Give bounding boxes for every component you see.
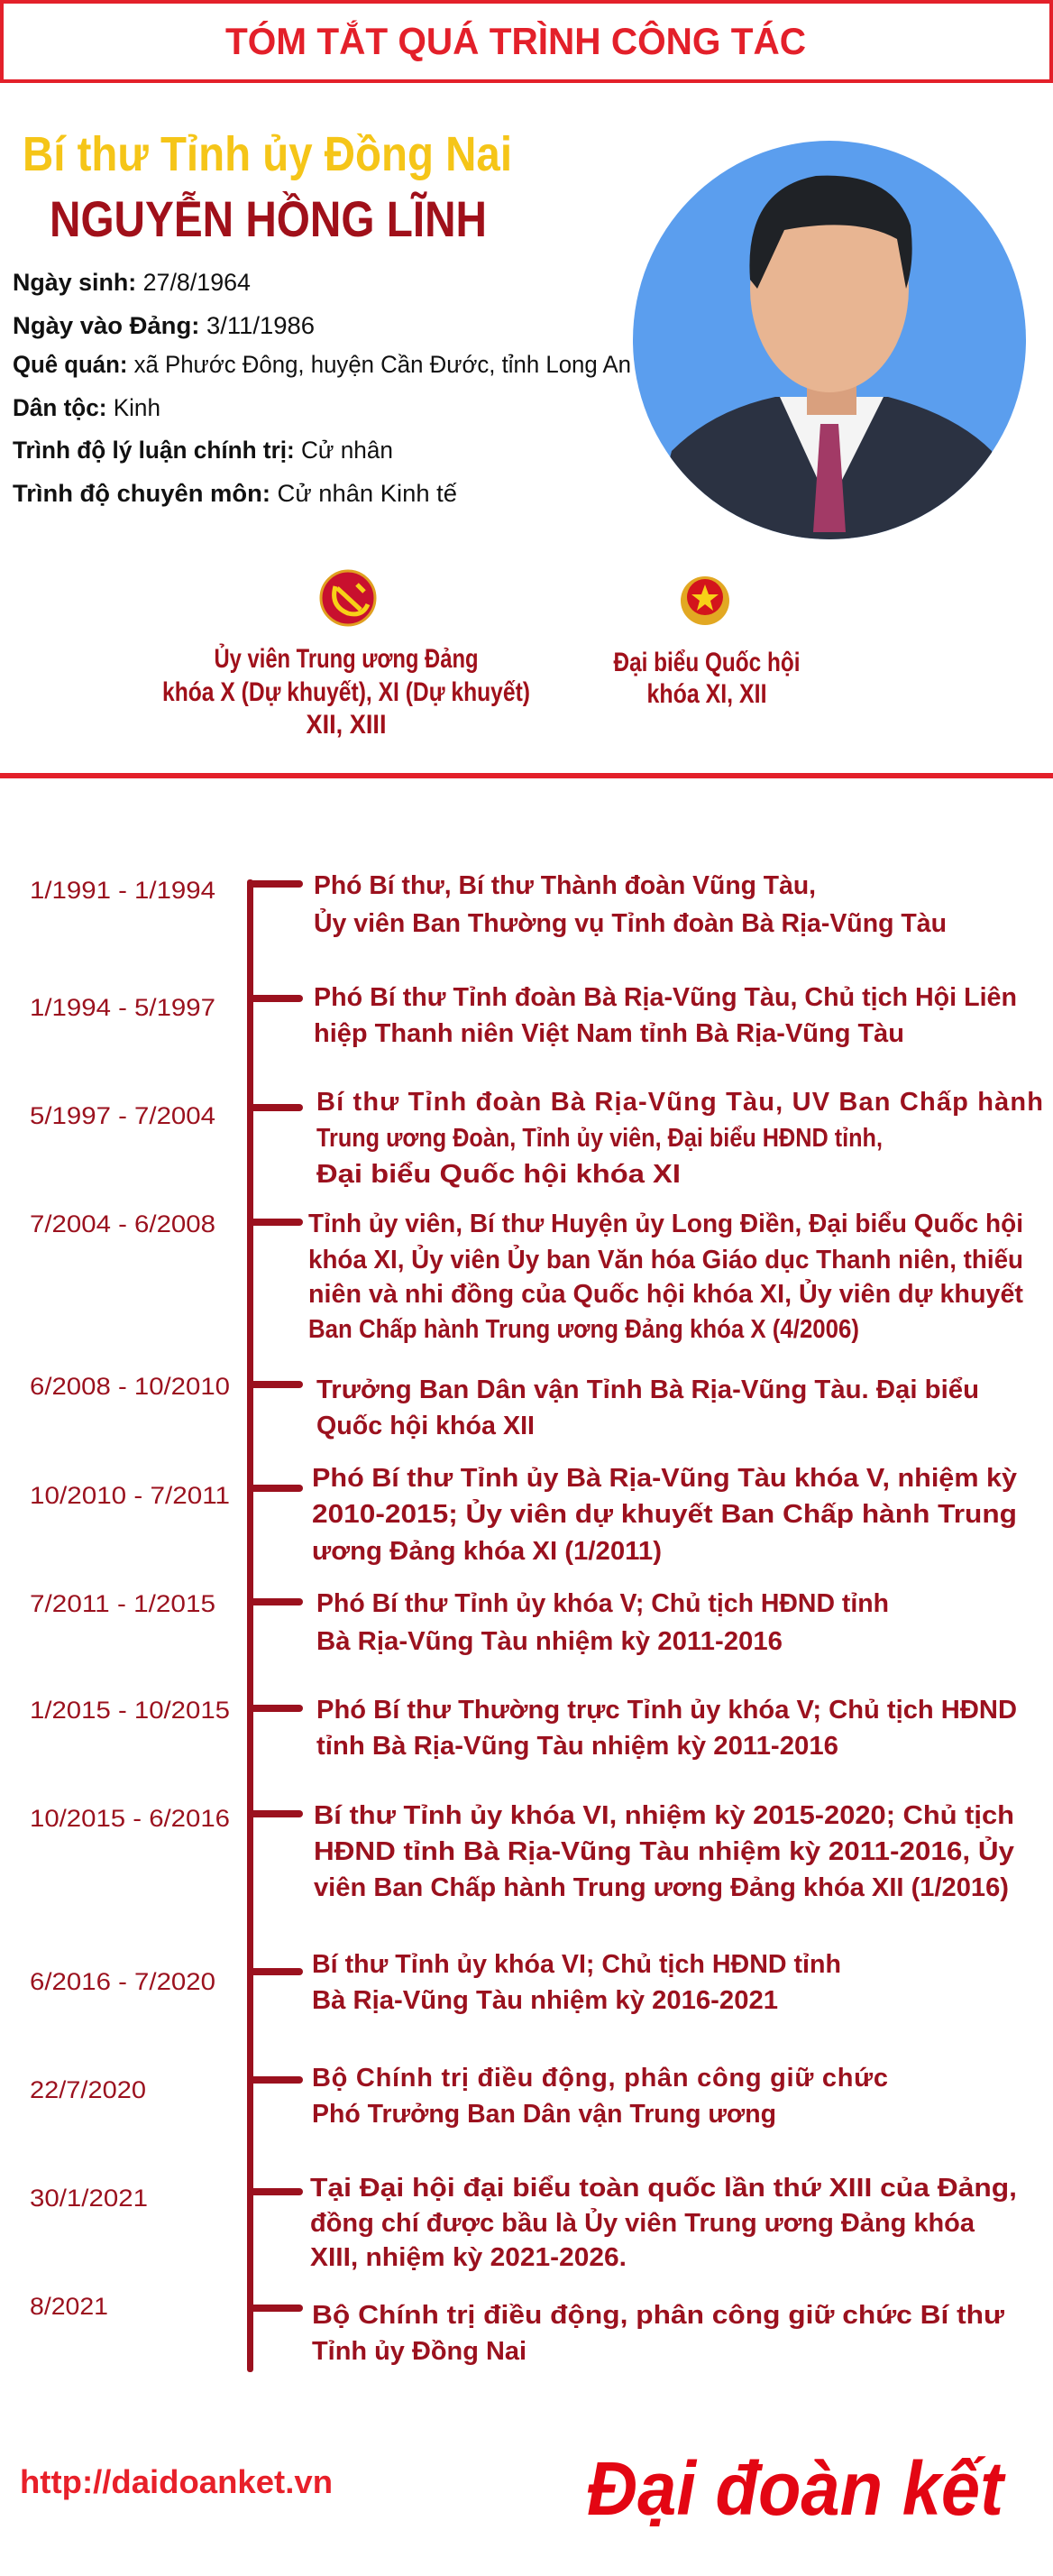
timeline entries: Phó Bí thư Thường trực Tỉnh ủy khóa V; Chủ tịch HĐND <box>316 1696 1017 1725</box>
personal info block: Dân tộc: Kinh <box>13 394 160 421</box>
name: NGUYỄN HỒNG LĨNH <box>50 190 487 247</box>
timeline dates: 6/2016 - 7/2020 <box>30 1968 215 1995</box>
timeline dates: 7/2004 - 6/2008 <box>30 1210 215 1237</box>
timeline entries: ương Đảng khóa XI (1/2011) <box>312 1537 662 1566</box>
title: TÓM TẮT QUÁ TRÌNH CÔNG TÁC <box>225 19 806 62</box>
personal info block <box>13 269 631 507</box>
timeline entries <box>308 871 1043 2366</box>
header box <box>2 2 1051 81</box>
party membership text: khóa X (Dự khuyết), XI (Dự khuyết) <box>162 677 530 707</box>
timeline entries: Bí thư Tỉnh ủy khóa VI, nhiệm kỳ 2015-2020; Chủ tịch <box>314 1801 1014 1830</box>
timeline entries: Trung ương Đoàn, Tỉnh ủy viên, Đại biểu HĐND tỉnh, <box>316 1124 883 1153</box>
timeline dates <box>30 877 230 2320</box>
timeline dates: 6/2008 - 10/2010 <box>30 1373 230 1400</box>
timeline entries: Phó Trưởng Ban Dân vận Trung ương <box>312 2100 776 2129</box>
timeline entries: XIII, nhiệm kỳ 2021-2026. <box>310 2243 627 2272</box>
timeline entries: viên Ban Chấp hành Trung ương Đảng khóa XII (1/2016) <box>314 1873 1009 1902</box>
party membership text: XII, XIII <box>307 710 386 740</box>
timeline dates: 1/2015 - 10/2015 <box>30 1697 230 1724</box>
timeline dates: 7/2011 - 1/2015 <box>30 1590 215 1617</box>
national assembly text: khóa XI, XII <box>647 679 766 709</box>
personal info block: Trình độ chuyên môn: Cử nhân Kinh tế <box>13 480 457 507</box>
timeline entries: khóa XI, Ủy viên Ủy ban Văn hóa Giáo dục Thanh niên, thiếu <box>308 1244 1023 1274</box>
timeline entries: đồng chí được bầu là Ủy viên Trung ương Đảng khóa <box>310 2207 975 2238</box>
timeline dates: 22/7/2020 <box>30 2076 146 2103</box>
timeline entries: Phó Bí thư Tỉnh đoàn Bà Rịa-Vũng Tàu, Chủ tịch Hội Liên <box>314 983 1017 1012</box>
party membership text: Ủy viên Trung ương Đảng <box>215 643 478 674</box>
personal info block: Ngày sinh: 27/8/1964 <box>13 269 251 296</box>
timeline entries: Bộ Chính trị điều động, phân công giữ chức Bí thư <box>312 2301 1004 2330</box>
timeline entries: Bà Rịa-Vũng Tàu nhiệm kỳ 2016-2021 <box>312 1986 778 2015</box>
timeline entries: Phó Bí thư Tỉnh ủy Bà Rịa-Vũng Tàu khóa V, nhiệm kỳ <box>312 1464 1017 1493</box>
timeline entries: hiệp Thanh niên Việt Nam tỉnh Bà Rịa-Vũng Tàu <box>314 1019 904 1048</box>
timeline entries: Đại biểu Quốc hội khóa XI <box>316 1160 681 1189</box>
timeline dates: 1/1994 - 5/1997 <box>30 994 215 1021</box>
national assembly text: Đại biểu Quốc hội <box>613 648 801 677</box>
timeline entries: Tại Đại hội đại biểu toàn quốc lần thứ XIII của Đảng, <box>310 2174 1017 2203</box>
footer url: http://daidoanket.vn <box>20 2463 333 2500</box>
timeline entries: Ủy viên Ban Thường vụ Tỉnh đoàn Bà Rịa-Vũng Tàu <box>314 907 947 938</box>
timeline entries: Quốc hội khóa XII <box>316 1412 535 1440</box>
national assembly text <box>613 648 801 709</box>
timeline entries: tỉnh Bà Rịa-Vũng Tàu nhiệm kỳ 2011-2016 <box>316 1732 838 1761</box>
timeline entries: Bộ Chính trị điều động, phân công giữ chức <box>312 2064 888 2093</box>
timeline entries: Bí thư Tỉnh ủy khóa VI; Chủ tịch HĐND tỉnh <box>312 1950 841 1979</box>
timeline <box>30 871 1043 2372</box>
personal info block: Trình độ lý luận chính trị: Cử nhân <box>13 437 393 464</box>
timeline axis <box>247 879 253 2372</box>
personal info block: Ngày vào Đảng: 3/11/1986 <box>13 312 315 339</box>
timeline entries: Bí thư Tỉnh đoàn Bà Rịa-Vũng Tàu, UV Ban Chấp hành <box>316 1088 1043 1117</box>
timeline entries: niên và nhi đồng của Quốc hội khóa XI, Ủy viên dự khuyết <box>308 1278 1023 1309</box>
timeline dates: 1/1991 - 1/1994 <box>30 877 215 904</box>
personal info block: Quê quán: xã Phước Đông, huyện Cần Đước, tỉnh Long An <box>13 351 631 378</box>
timeline entries: Tỉnh ủy viên, Bí thư Huyện ủy Long Điền, Đại biểu Quốc hội <box>308 1210 1023 1238</box>
timeline entries: Bà Rịa-Vũng Tàu nhiệm kỳ 2011-2016 <box>316 1627 783 1656</box>
timeline dates: 5/1997 - 7/2004 <box>30 1102 215 1129</box>
timeline dates: 8/2021 <box>30 2293 108 2320</box>
timeline entries: Tỉnh ủy Đồng Nai <box>312 2337 526 2366</box>
icon: party emblem <box>321 571 375 625</box>
logo: Dai doan ket: Đại đoàn kết <box>587 2446 1006 2531</box>
timeline entries: 2010-2015; Ủy viên dự khuyết Ban Chấp hành Trung <box>312 1498 1017 1529</box>
timeline entries: Trưởng Ban Dân vận Tỉnh Bà Rịa-Vũng Tàu. Đại biểu <box>316 1375 979 1404</box>
timeline entries: HĐND tỉnh Bà Rịa-Vũng Tàu nhiệm kỳ 2011-2016, Ủy <box>314 1835 1014 1866</box>
timeline dates: 10/2015 - 6/2016 <box>30 1805 230 1832</box>
portrait photo <box>633 141 1026 541</box>
subtitle: position: Bí thư Tỉnh ủy Đồng Nai <box>23 127 512 181</box>
timeline dates: 30/1/2021 <box>30 2185 148 2212</box>
timeline entries: Ban Chấp hành Trung ương Đảng khóa X (4/2006) <box>308 1315 859 1344</box>
party membership text <box>162 643 530 740</box>
icon: state emblem <box>681 576 729 625</box>
timeline entries: Phó Bí thư Tỉnh ủy khóa V; Chủ tịch HĐND tỉnh <box>316 1589 889 1618</box>
timeline entries: Phó Bí thư, Bí thư Thành đoàn Vũng Tàu, <box>314 871 816 900</box>
timeline dates: 10/2010 - 7/2011 <box>30 1482 230 1509</box>
